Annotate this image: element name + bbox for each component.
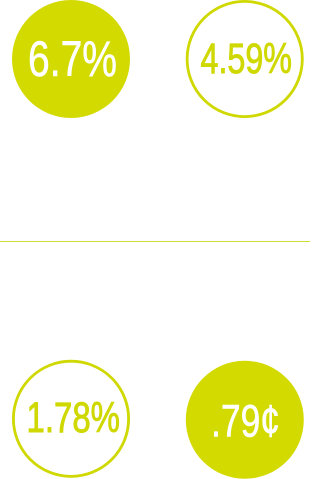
stat: 1.78% outlined circle: 1.78% [26, 394, 120, 442]
divider line [0, 241, 310, 242]
stat: 4.59% outlined circle [187, 1, 302, 117]
stat: .79 cents filled circle [186, 361, 304, 479]
stat: .79 cents filled circle: .79¢ [211, 396, 280, 446]
stat: 6.7% filled circle [12, 0, 130, 118]
stat: 6.7% filled circle: 6.7% [28, 31, 117, 87]
stat: 1.78% outlined circle [13, 361, 129, 476]
